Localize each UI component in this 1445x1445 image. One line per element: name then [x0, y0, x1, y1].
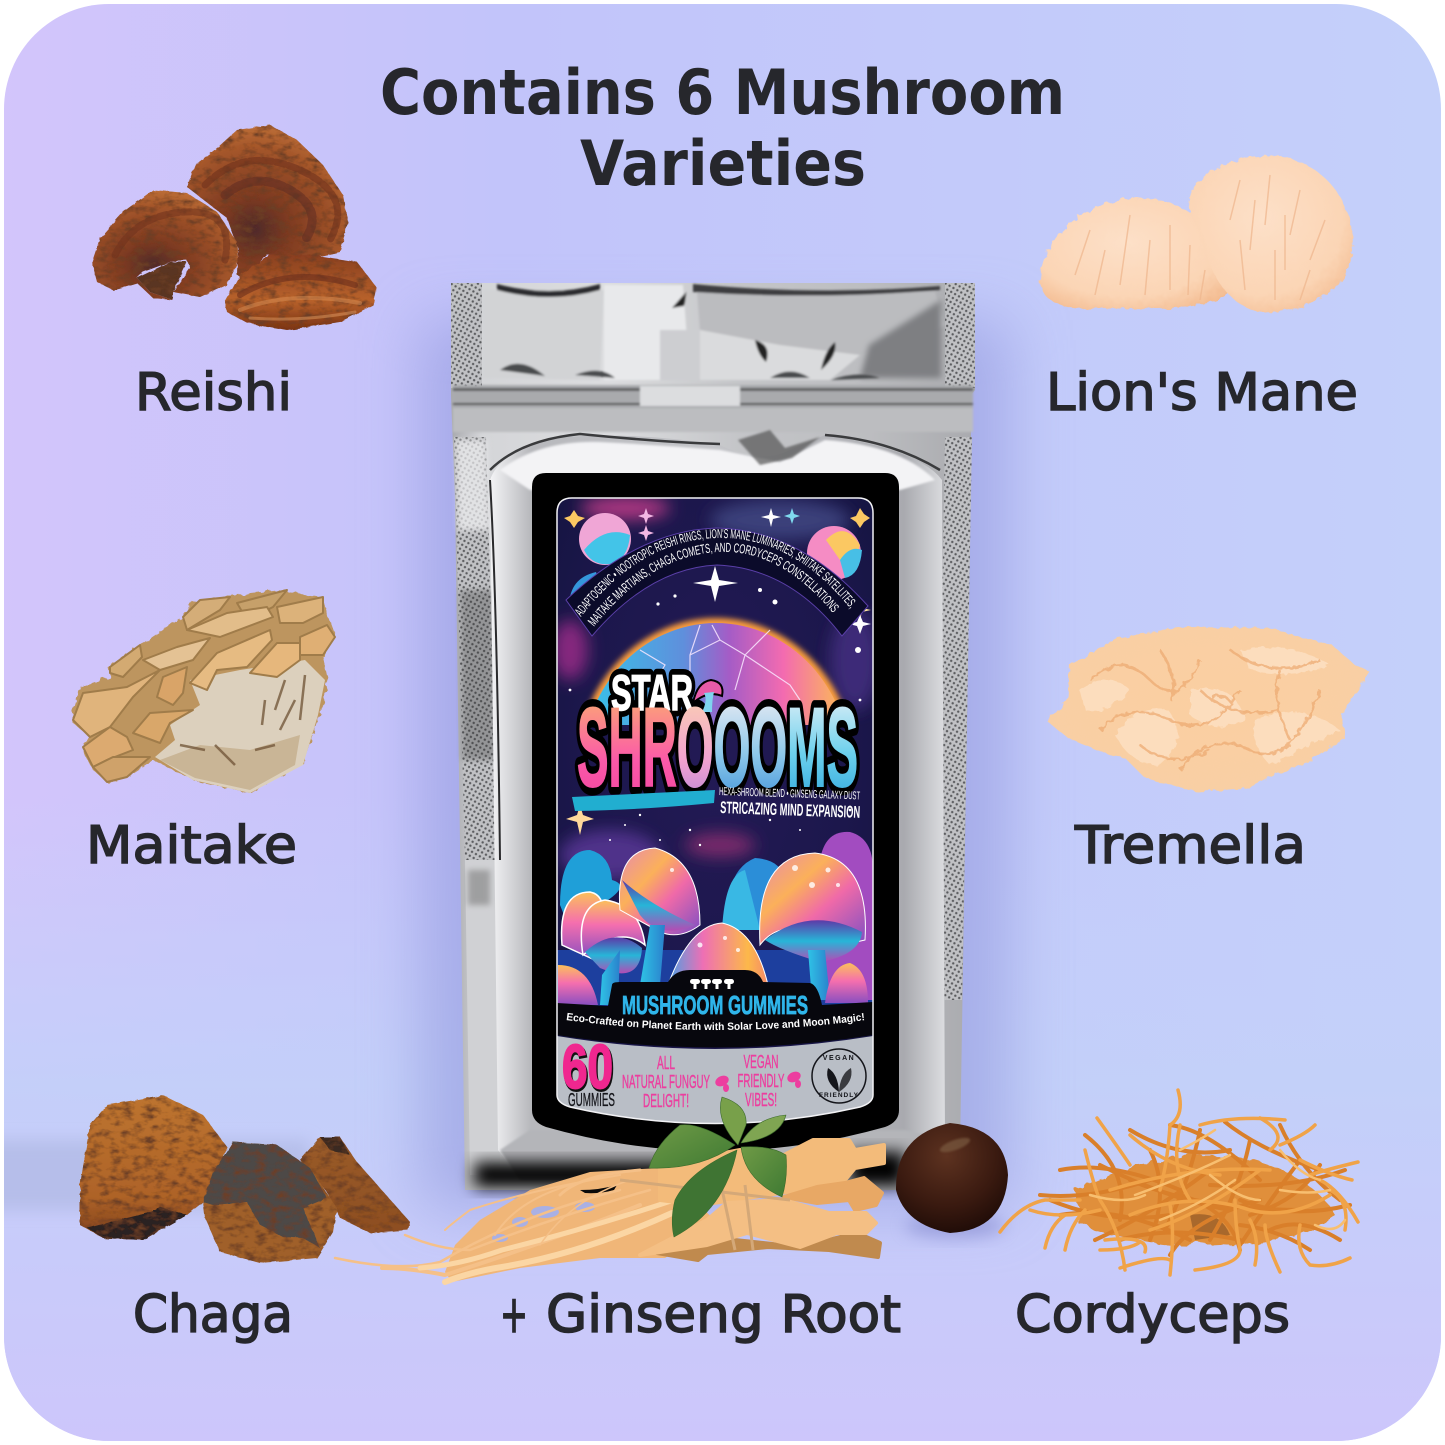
ginseng leaves	[649, 1097, 786, 1237]
Lion's Mane mushroom image	[1040, 155, 1353, 312]
crimped side seams	[451, 283, 975, 1175]
vegan friendly badge: VEGAN	[823, 1055, 855, 1062]
logo SHROOOMS: SHROOOMS	[577, 685, 858, 810]
label artwork	[558, 498, 872, 1123]
Maitake label: Maitake	[86, 816, 297, 876]
logo mushroom icon	[693, 680, 723, 712]
vegan friendly badge	[812, 1049, 866, 1103]
eco crafted line: Eco-Crafted on Planet Earth with Solar Love and Moon Magic!	[566, 1012, 864, 1030]
ginseng root	[335, 1097, 884, 1282]
vegan claim: VEGAN	[744, 1052, 778, 1072]
ginseng label: Ginseng Root	[546, 1285, 901, 1345]
Chaga mushroom image	[80, 1095, 410, 1263]
glowing planet dome	[586, 613, 845, 725]
strands pale	[1090, 1130, 1345, 1229]
60 gummies	[562, 1044, 615, 1106]
vegan friendly badge: FRIENDLY	[819, 1092, 859, 1099]
vegan claim: VIBES!	[745, 1090, 777, 1110]
arched banner	[566, 528, 868, 636]
all natural claim: DELIGHT!	[643, 1091, 689, 1111]
all natural claim	[622, 1056, 710, 1108]
black label backing	[532, 473, 899, 1151]
all natural claim: NATURAL FUNGUY	[622, 1072, 710, 1092]
pouch zipper	[453, 385, 973, 432]
Tremella label: Tremella	[1074, 816, 1306, 876]
ginseng label: +	[500, 1285, 528, 1345]
Tremella mushroom image	[1048, 627, 1370, 792]
logo backing outline	[574, 668, 860, 796]
logo backing outline: STAR	[611, 665, 693, 721]
mushroom forest illustration	[557, 832, 873, 1010]
all natural claim: ALL	[657, 1053, 675, 1073]
root mass	[445, 1168, 720, 1282]
Lion's Mane label: Lion's Mane	[1046, 363, 1358, 423]
product pouch: SHROOOMS	[577, 685, 858, 810]
maitake fronds	[73, 590, 335, 782]
pouch body	[451, 283, 975, 1190]
rootlets	[335, 1170, 674, 1282]
pouch bottom shadow	[474, 1162, 680, 1188]
tagline: HEXA-SHROOM BLEND • GINSENG GALAXY DUST	[719, 786, 860, 802]
maitake pale core	[155, 660, 325, 793]
dark core	[1075, 1154, 1335, 1246]
logo STAR: STAR	[611, 665, 693, 721]
stars	[564, 508, 871, 846]
vegan claim	[738, 1054, 784, 1106]
planets	[579, 513, 631, 565]
gaps between rootlets	[492, 1202, 595, 1242]
twine	[620, 1180, 790, 1250]
grey info strip	[557, 1036, 873, 1130]
pink mushroom icons	[715, 1072, 801, 1092]
main root	[640, 1200, 876, 1255]
60 gummies: GUMMIES	[568, 1090, 615, 1110]
banner text line 2: MAITAKE MARTIANS, CHAGA COMETS, AND CORDYCEPS CONSTELLATIONS	[588, 542, 839, 626]
strands light	[1000, 1090, 1358, 1275]
title	[380, 56, 1065, 200]
Reishi label: Reishi	[135, 363, 292, 423]
maitake base	[72, 590, 335, 793]
strands dark	[1040, 1122, 1350, 1255]
gummy	[896, 1123, 1008, 1238]
60 gummies: 60	[563, 1035, 614, 1104]
MUSHROOM GUMMIES: MUSHROOM GUMMIES	[622, 990, 808, 1020]
60 gummies: 60	[562, 1033, 613, 1102]
tagline	[720, 787, 860, 818]
black gap spot	[580, 1185, 617, 1193]
title: Contains 6 Mushroom	[380, 56, 1065, 129]
Cordyceps label: Cordyceps	[1015, 1285, 1290, 1345]
inner pouch panel	[490, 435, 945, 1180]
nebula clouds	[552, 496, 880, 880]
product pouch	[451, 282, 975, 1200]
vegan claim: FRIENDLY	[738, 1071, 784, 1091]
pouch top wrinkles	[483, 284, 945, 380]
Reishi mushroom image	[92, 125, 377, 330]
tab mushroom icons	[690, 979, 734, 989]
middle root	[784, 1178, 882, 1210]
label white edge	[557, 498, 873, 1124]
teal underline swoosh	[572, 790, 715, 811]
upper root	[660, 1140, 884, 1205]
Cordyceps mushroom image	[1000, 1090, 1358, 1275]
banner text line 1: ADAPTOGENIC • NOOTROPIC REISHI RINGS, LION'S MANE LUMINARIES, SHIITAKE SATELLITES,	[575, 529, 856, 617]
banner tab and black band	[557, 970, 873, 1048]
title: Varieties	[580, 127, 866, 200]
Chaga label: Chaga	[133, 1285, 293, 1345]
lower root	[657, 1233, 880, 1260]
Maitake mushroom image	[72, 590, 335, 793]
tagline: STRICAZING MIND EXPANSION	[720, 798, 860, 822]
